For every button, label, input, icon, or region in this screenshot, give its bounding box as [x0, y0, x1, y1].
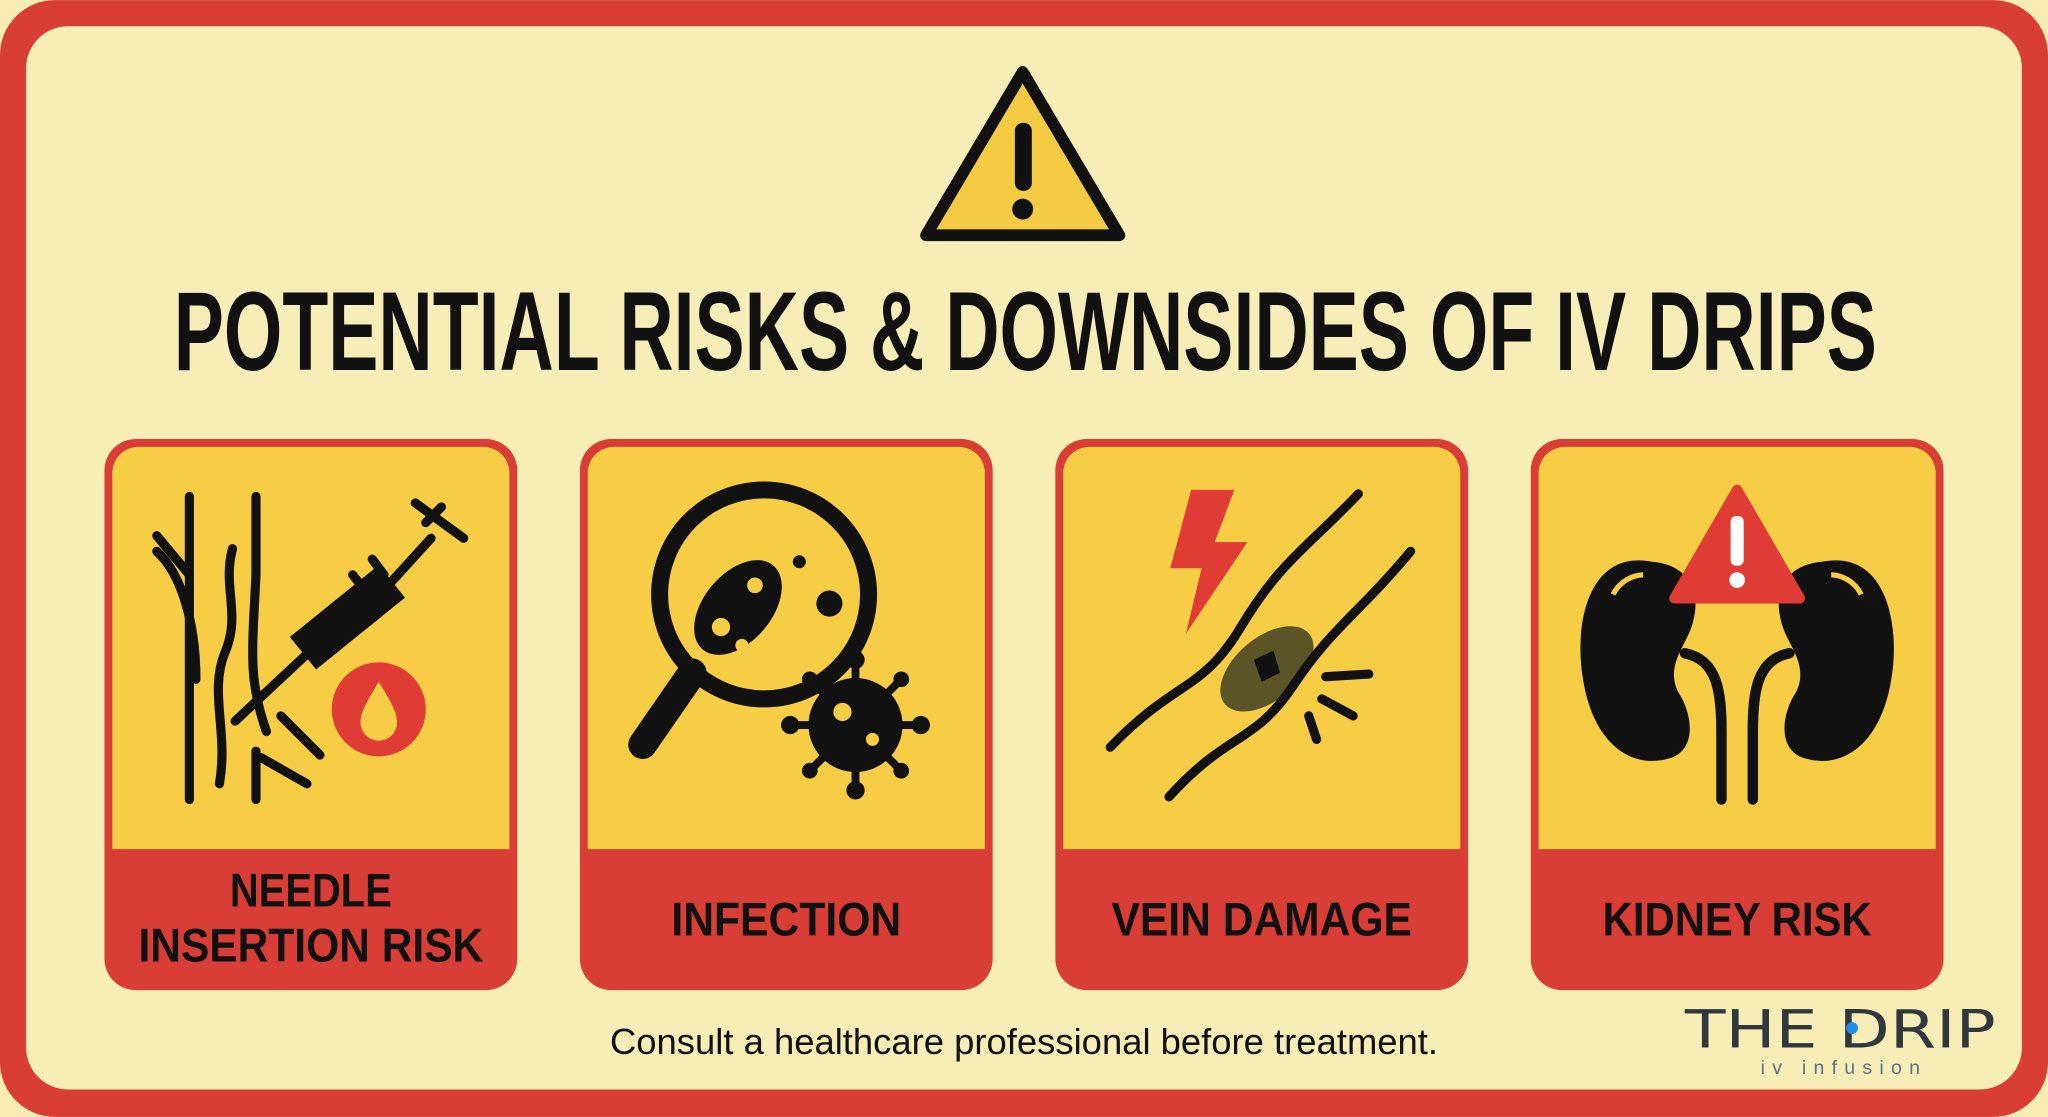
- logo: The Drip iv infusion: THE DRIP: [1684, 1001, 1996, 1061]
- icon: damaged vein with lightning: [1110, 490, 1411, 797]
- icon: warning triangle: [926, 72, 1119, 235]
- logo: The Drip iv infusion: [1684, 1001, 1996, 1079]
- label: KIDNEY RISK: [1603, 892, 1872, 945]
- logo: The Drip iv infusion: iv infusion: [1761, 1057, 1920, 1079]
- icon: blood drop: [332, 662, 426, 756]
- footer note: Consult a healthcare professional before treatment.: [610, 1021, 1438, 1062]
- panel: vein damage: [1055, 439, 1468, 990]
- panel: infection: [580, 439, 993, 990]
- icon: magnifier with bacteria and virus: [643, 490, 930, 799]
- panel: needle insertion risk: [104, 439, 517, 990]
- panel: needle insertion risk: INSERTION RISK: [138, 918, 483, 971]
- icon: kidneys with warning: [1580, 490, 1894, 799]
- label: INFECTION: [671, 892, 901, 945]
- panel: kidney risk: [1531, 439, 1944, 990]
- label: NEEDLE: [230, 864, 392, 917]
- label: VEIN DAMAGE: [1112, 892, 1412, 945]
- icon: veins and syringe: [157, 496, 464, 799]
